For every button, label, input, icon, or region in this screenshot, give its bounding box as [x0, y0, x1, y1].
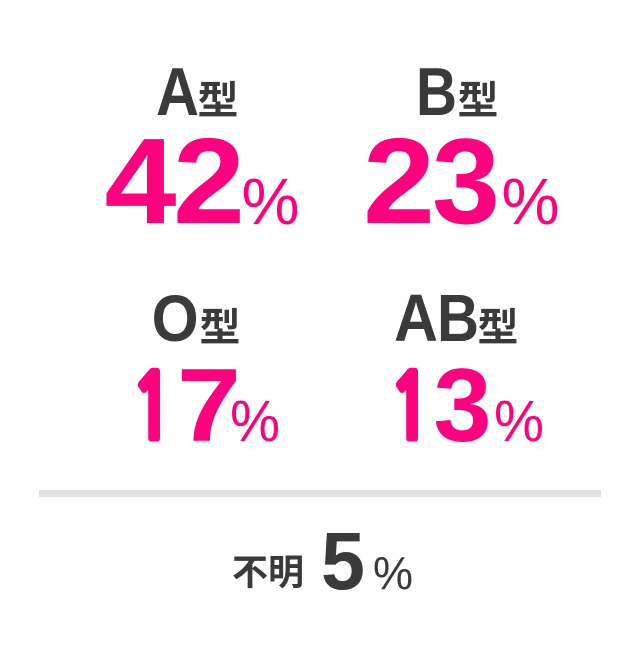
- stat: AB type 13%: B: [437, 281, 479, 356]
- stat: AB type 13%: 1: [388, 364, 432, 452]
- stat: unknown 5%: [232, 516, 413, 607]
- stat: unknown 5%: 5: [321, 516, 365, 607]
- stat: O type 17%: 1: [130, 364, 174, 452]
- stat: B type 23%: %: [502, 164, 560, 238]
- stat: AB type 13%: 3: [434, 348, 492, 464]
- stat: AB type 13%: [388, 281, 544, 464]
- stat: B type 23%: 3: [432, 113, 500, 249]
- stat: unknown 5%: %: [373, 547, 413, 599]
- stat: A type 42%: %: [242, 164, 300, 238]
- stat: O type 17%: 型: [200, 307, 240, 350]
- stat: A type 42%: 2: [173, 113, 245, 249]
- stat: O type 17%: O: [152, 281, 199, 355]
- stat: O type 17%: %: [230, 389, 280, 454]
- stat: A type 42%: 4: [104, 113, 177, 249]
- stat: AB type 13%: A: [394, 281, 438, 356]
- stat: A type 42%: [104, 54, 300, 249]
- stat: O type 17%: 7: [177, 348, 241, 464]
- stat: AB type 13%: %: [494, 389, 544, 454]
- stat: A type 42%: A: [156, 54, 199, 130]
- stat: B type 23%: B: [416, 54, 457, 130]
- stat: B type 23%: 2: [363, 113, 435, 249]
- stat: O type 17%: [130, 281, 280, 464]
- stat: A type 42%: 型: [198, 80, 238, 123]
- stat: B type 23%: 型: [458, 80, 498, 123]
- stat: AB type 13%: 型: [478, 307, 518, 350]
- stat: B type 23%: [363, 54, 560, 249]
- divider: [39, 490, 601, 497]
- stat: unknown 5%: 不明: [232, 552, 304, 592]
